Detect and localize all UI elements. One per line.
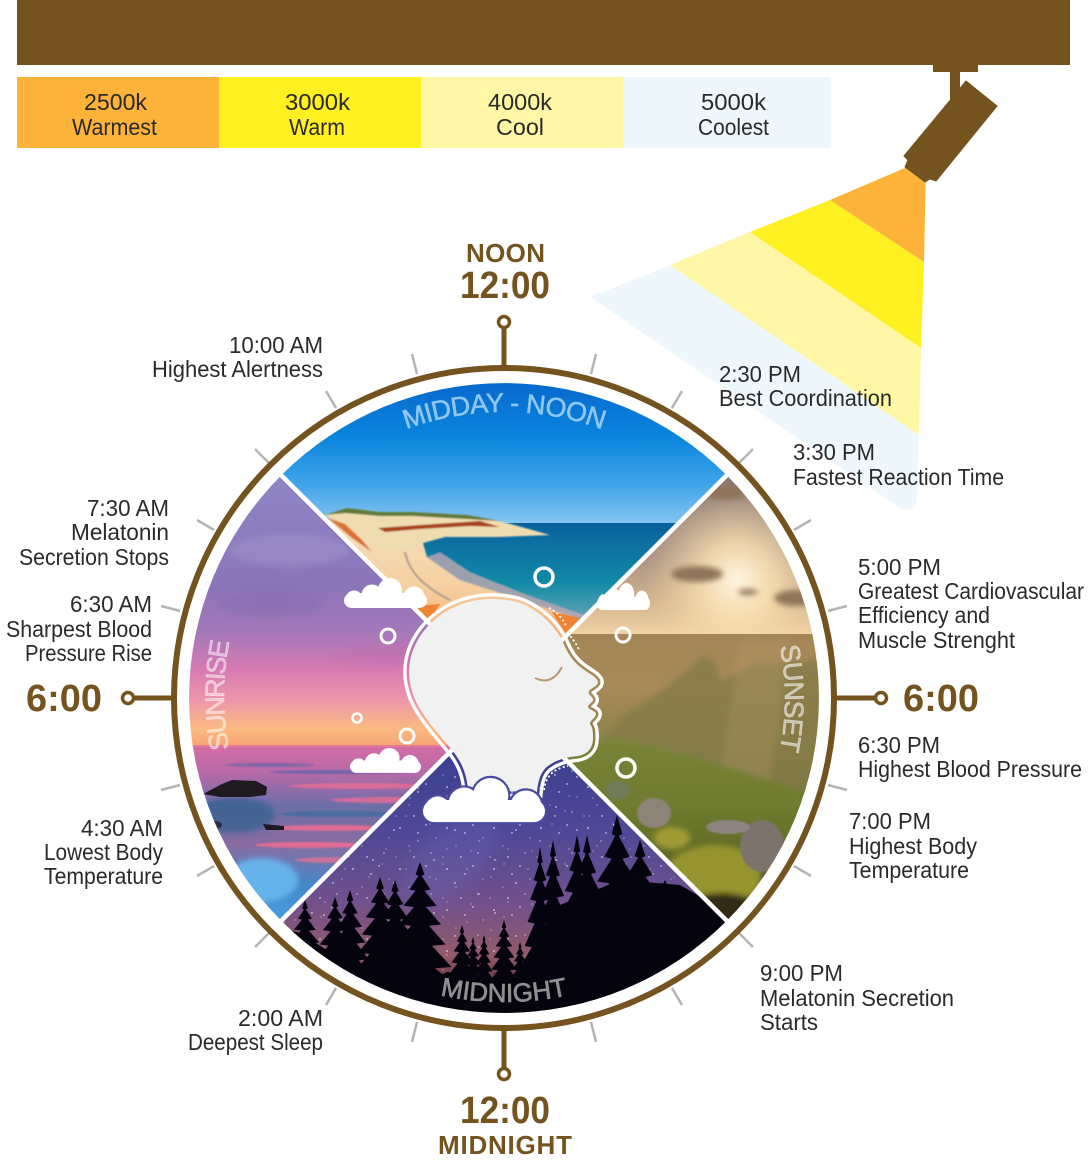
marker: noon: [498, 316, 510, 367]
event: best coordination: 2:30 PM: [719, 361, 801, 387]
event: highest blood pressure: [858, 732, 1082, 782]
clock label: 6 right: 6:00: [903, 678, 979, 720]
marker: 6 pm: [834, 692, 886, 704]
event: cardiovascular efficiency: Efficiency and: [858, 602, 990, 628]
event: blood pressure rise: Sharpest Blood: [6, 616, 152, 642]
clock label: noon: NOON: [466, 238, 545, 268]
event: blood pressure rise: Pressure Rise: [25, 640, 152, 666]
event: highest alertness: 10:00 AM: [229, 332, 323, 358]
event: highest temperature: [849, 808, 977, 883]
event: deepest sleep: [188, 1005, 323, 1055]
event: cardiovascular efficiency: Muscle Strenght: [858, 627, 1016, 653]
cloud: upper right: [597, 583, 650, 610]
sector title: midday: MIDDAY - NOON: [402, 393, 606, 429]
sector title: sunset: SUNSET: [780, 646, 804, 754]
swatch: 4000k cool: [421, 77, 623, 148]
event: lowest temperature: Lowest Body: [44, 839, 163, 865]
swatch: 2500k warmest: 2500k: [84, 89, 147, 115]
photo: midday beach: [282, 383, 725, 638]
swatch: 5000k coolest: 5000k: [701, 89, 767, 115]
swatch: 4000k cool: 4000k: [488, 89, 553, 115]
marker: 6 am: [122, 692, 174, 704]
swatch: 3000k warm: [219, 77, 421, 148]
event: melatonin starts: Melatonin Secretion: [760, 985, 954, 1011]
cloud: lower left: [350, 748, 421, 773]
photo: night sky: [283, 752, 726, 1013]
event: melatonin stops: Melatonin: [71, 519, 169, 545]
clock label: midnight: 12:00: [460, 1090, 550, 1132]
event: melatonin starts: [760, 960, 954, 1035]
cloud: upper left: [344, 578, 427, 608]
clock label: noon: 12:00: [460, 265, 550, 307]
head silhouette: [409, 599, 598, 792]
event: melatonin starts: Starts: [760, 1009, 818, 1035]
event: cardiovascular efficiency: 5:00 PM: [858, 554, 941, 580]
event: best coordination: Best Coordination: [719, 385, 892, 411]
hour markers: [122, 316, 886, 1080]
event: highest blood pressure: 6:30 PM: [858, 732, 940, 758]
head outline: [409, 599, 598, 792]
event: highest temperature: 7:00 PM: [849, 808, 931, 834]
track bar: [17, 0, 1070, 65]
event: blood pressure rise: 6:30 AM: [70, 591, 152, 617]
marker: midnight: [498, 1029, 510, 1080]
clock label: 6 left: 6:00: [26, 678, 102, 720]
swatch: 5000k coolest: Coolest: [698, 114, 770, 140]
event: best coordination: [719, 361, 892, 411]
event: melatonin starts: 9:00 PM: [760, 960, 843, 986]
eyelid: [535, 667, 562, 680]
swatch: 3000k warm: Warm: [289, 114, 345, 140]
swatch: 5000k coolest: [623, 77, 831, 148]
clock label: midnight: [438, 1090, 572, 1160]
event: blood pressure rise: [6, 591, 152, 666]
clock ticks: [161, 354, 847, 1042]
clock ring: [174, 368, 834, 1028]
colour temperature legend: [17, 77, 831, 148]
cloud: neck: [423, 778, 545, 822]
event: melatonin stops: Secretion Stops: [19, 544, 169, 570]
dotted accents: [544, 608, 579, 790]
event: highest temperature: Temperature: [849, 857, 969, 883]
event: highest alertness: [152, 332, 323, 382]
sector title: sunrise: SUNRISE: [205, 640, 230, 750]
event: lowest temperature: [44, 815, 163, 889]
event: melatonin stops: 7:30 AM: [87, 495, 169, 521]
swatch: 2500k warmest: Warmest: [72, 114, 158, 140]
clock label: noon: [460, 238, 550, 307]
event: fastest reaction: 3:30 PM: [793, 439, 875, 465]
icon: track spotlight: [904, 65, 997, 182]
event: lowest temperature: Temperature: [44, 863, 163, 889]
swatch: 3000k warm: 3000k: [285, 89, 351, 115]
event: highest alertness: Highest Alertness: [152, 356, 323, 382]
event: highest temperature: Highest Body: [849, 833, 977, 859]
bubbles: [352, 568, 635, 777]
sector dividers: [279, 473, 729, 923]
event: fastest reaction: Fastest Reaction Time: [793, 464, 1004, 490]
swatch: 4000k cool: Cool: [496, 114, 544, 140]
event: cardiovascular efficiency: [858, 554, 1084, 653]
photo: sunrise ocean: [189, 477, 450, 919]
photo: sunset hills: [563, 477, 819, 920]
event: deepest sleep: 2:00 AM: [238, 1005, 323, 1031]
light beam: [590, 165, 926, 509]
sector title: midnight: MIDNIGHT: [442, 977, 565, 1002]
event: deepest sleep: Deepest Sleep: [188, 1029, 323, 1055]
clouds: [344, 578, 650, 822]
cloud: neck outline: [423, 778, 545, 822]
clock label: midnight: MIDNIGHT: [438, 1130, 572, 1160]
swatch: 2500k warmest: [17, 77, 219, 148]
event: fastest reaction: [793, 439, 1004, 490]
event: lowest temperature: 4:30 AM: [81, 815, 163, 841]
event: melatonin stops: [19, 495, 169, 570]
